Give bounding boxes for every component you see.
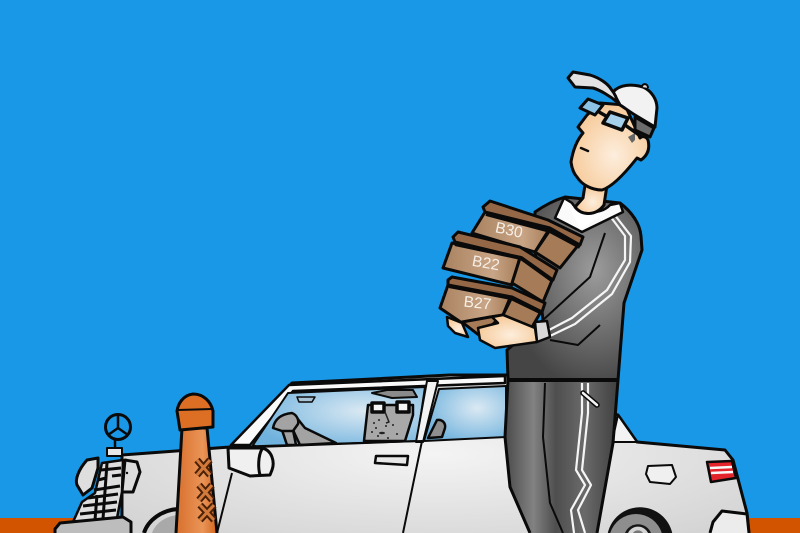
trouser stripes — [571, 383, 591, 533]
box B27 — [440, 277, 545, 336]
bollard — [176, 394, 217, 533]
sunglasses — [580, 99, 642, 137]
driver forearm — [282, 430, 296, 445]
ground strip — [0, 518, 800, 533]
driver cap — [372, 390, 417, 398]
rear side window — [424, 386, 506, 441]
man — [440, 72, 657, 533]
sideburn — [628, 133, 635, 143]
rear-view mirror — [297, 397, 315, 402]
mouth — [581, 148, 588, 151]
bollard shaft — [176, 428, 217, 533]
headlight marker — [126, 472, 128, 474]
jacket — [507, 197, 642, 380]
door pillar — [416, 381, 438, 442]
passenger seat — [428, 420, 445, 438]
driver glasses — [372, 402, 409, 412]
car front: grille, headlights, emblem — [55, 414, 140, 533]
pocket — [583, 393, 597, 405]
front side window — [253, 387, 425, 447]
cuff — [535, 321, 550, 342]
car body — [122, 375, 749, 533]
hands — [447, 315, 537, 348]
t-shirt and collar — [555, 198, 623, 232]
bollard cap — [177, 394, 213, 430]
door lines — [217, 441, 422, 533]
box B30 — [472, 201, 583, 268]
sleeve stripes — [549, 214, 631, 336]
door handle — [375, 456, 408, 465]
driver — [273, 390, 417, 445]
fuel cap — [646, 465, 676, 484]
rear window triangle — [612, 415, 637, 442]
emblem base — [107, 448, 122, 456]
driver face — [364, 405, 413, 441]
car — [122, 375, 749, 533]
headlight left — [76, 458, 98, 495]
grille — [73, 460, 123, 522]
box B22 — [443, 232, 557, 302]
rear wheel — [608, 507, 672, 533]
cap — [568, 72, 657, 137]
tail light — [707, 461, 736, 482]
roof trim — [231, 376, 505, 445]
side mirror — [228, 448, 273, 476]
headlight right — [122, 460, 140, 492]
amsterdam crosses — [197, 460, 214, 520]
trousers — [505, 380, 618, 533]
driver hand — [273, 413, 298, 431]
rear bumper — [710, 511, 749, 533]
label B27: B27 — [463, 294, 492, 313]
driver nose and stubble — [371, 412, 398, 439]
label B30: B30 — [494, 219, 525, 242]
mercedes emblem — [106, 414, 130, 449]
boxes — [440, 201, 583, 336]
neck and head — [571, 103, 649, 214]
front bumper — [55, 517, 131, 533]
driver arm — [293, 418, 336, 445]
label B22: B22 — [471, 253, 501, 274]
front wheel — [144, 509, 178, 533]
